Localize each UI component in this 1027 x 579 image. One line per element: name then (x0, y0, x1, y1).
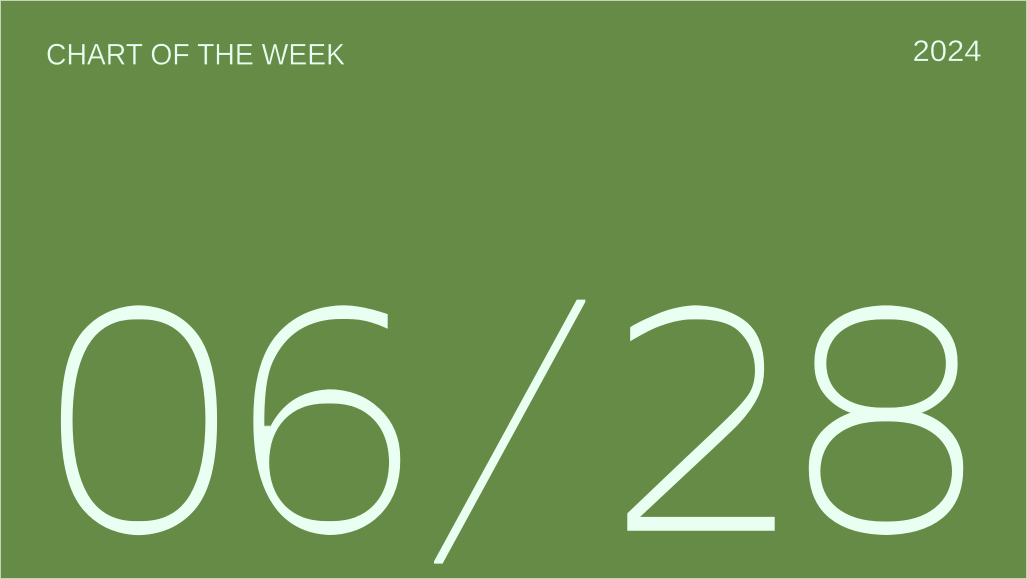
large date: 06/28 (26, 237, 1000, 579)
heading: chart of the week: CHART OF THE WEEK (46, 38, 345, 72)
year label: 2024 (912, 35, 982, 68)
